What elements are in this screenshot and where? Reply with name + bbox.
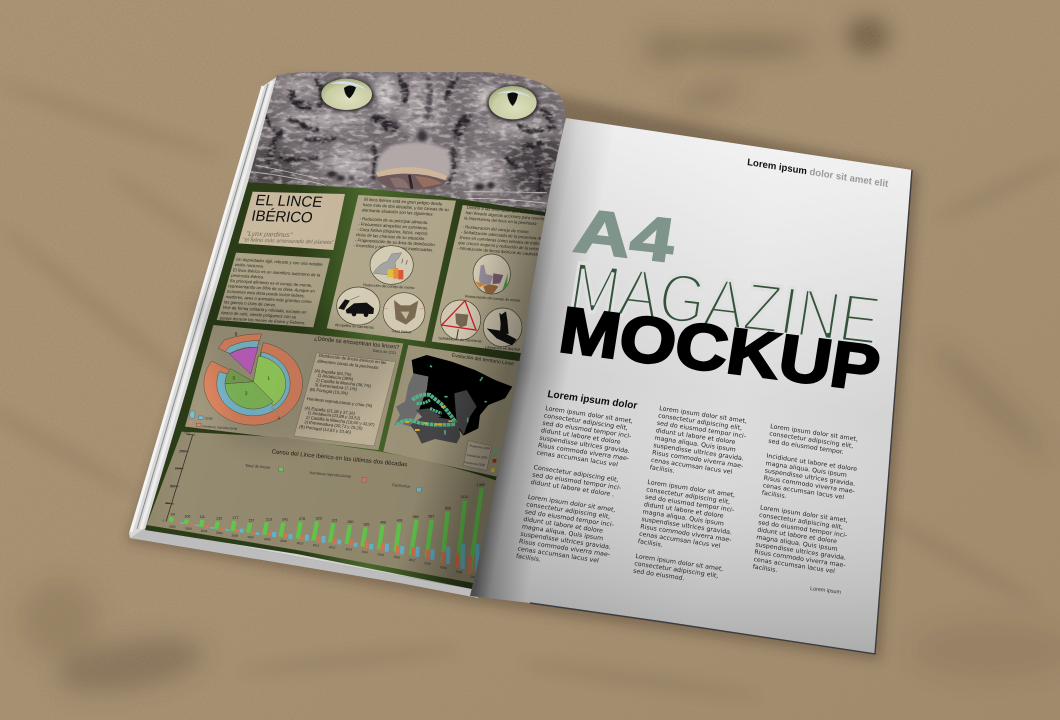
poster: dark green backing	[145, 182, 550, 590]
circle captions	[335, 323, 520, 352]
icon: car roadkill	[337, 287, 380, 325]
panel: census chart	[147, 430, 497, 583]
panel: description text: roedores, aves o animales más grandes como	[225, 294, 313, 304]
panel: conservation: que crucen seguros y reducción de la velocidad	[458, 240, 548, 252]
text column 2: Risus commodo viverra mae-	[640, 523, 732, 544]
panel: census chart: 2000	[183, 430, 190, 434]
chart legend: Cachorros	[392, 482, 411, 489]
text column 3: Incididunt ut labore et dolore	[766, 453, 858, 473]
panel: distribution data box: diferentes zonas de la península:	[317, 358, 379, 370]
text column 2: suspendisse ultrices gravida.	[641, 516, 732, 536]
text column 1	[515, 405, 637, 573]
bar value labels: 321	[332, 518, 338, 522]
headline: MAGAZINE: MAGAZINE	[565, 248, 885, 360]
bar value labels: 100	[184, 514, 190, 518]
right page	[470, 118, 912, 654]
text column 2	[633, 405, 751, 588]
year labels: 2015	[377, 552, 385, 557]
year labels: 2007	[247, 535, 255, 540]
text column 2: didunt ut labore et dolore	[643, 501, 724, 520]
map: Spain	[412, 355, 512, 436]
panel: description text: Su principal alimento es el conejo de monte,	[229, 278, 313, 288]
panel: title tile: EL LINCE	[254, 192, 324, 211]
text column 3: didunt ut labore et dolore	[757, 527, 837, 545]
text column 1: Risus commodo viverra mae-	[537, 442, 630, 463]
poster lower half	[147, 323, 523, 583]
panel: distribution data box: 3) Extremadura (7,1%)	[314, 382, 358, 392]
year labels: 2002	[169, 524, 176, 529]
panel: description text: época de celo, siendo polígamos con su	[221, 310, 297, 320]
pie labels: 1	[267, 375, 270, 380]
text column 1: magna aliqua. Quis ipsum	[521, 523, 604, 542]
map: lynx range patches	[397, 366, 487, 435]
subheading: Lorem ipsum dolor	[546, 389, 638, 412]
poster photo: lynx face close-up	[248, 72, 566, 212]
text column 1: Lorem ipsum dolor sit amet,	[545, 405, 634, 425]
text column 2: facilisis.	[649, 464, 675, 475]
panel: conservation: la importancia del lince en la península:	[464, 215, 538, 226]
panel: description text: los gamos o crías de ciervo.	[223, 299, 277, 307]
pie legend: Crías	[205, 416, 213, 420]
pie chart: lynx distribution	[204, 334, 303, 425]
cheek pad spots	[327, 170, 495, 190]
text column 1: sed do eiusmod tempor inci-	[524, 509, 614, 529]
heading: where are the lynxes: ¿Dónde se encuentran los linces?	[314, 336, 399, 351]
bar value labels: 323	[316, 516, 322, 520]
fur tone masses	[243, 77, 573, 197]
headline: MOCKUP: MOCKUP	[555, 293, 885, 405]
pie labels: 2	[245, 391, 248, 396]
text column 2: magna aliqua. Quis ipsum	[654, 435, 736, 454]
text column 3: Risus commodo viverra mae-	[754, 549, 846, 569]
bar value labels: 94	[171, 512, 175, 516]
panel: census chart: 1500	[179, 449, 186, 453]
panel: pie section	[185, 325, 403, 450]
text column 3: cenas accumsan lacus vel	[762, 482, 845, 501]
text column 2: suspendisse ultrices gravida.	[653, 442, 744, 462]
text column 1: didunt ut labore et dolore	[540, 427, 621, 446]
page header: Lorem ipsum dolor sit amet elit	[747, 157, 889, 190]
year labels: 2016	[393, 555, 401, 560]
panel: threats: - Reducción de su principal alimento.	[359, 216, 429, 225]
text column 3: Lorem ipsum dolor sit amet,	[770, 423, 858, 443]
panel: title tile	[238, 192, 345, 250]
text column 2: Lorem ipsum dolor sit amet,	[659, 405, 748, 425]
panel: distribution data box: (A) España (84,7%)	[314, 368, 353, 377]
text column 2: Lorem ipsum dolor sit amet,	[647, 479, 736, 499]
icon: lynx silhouette	[483, 308, 522, 347]
text column 1: didunt ut labore et dolore .	[530, 479, 615, 498]
panel: distribution data box: 1) Andalucía (38%)	[317, 373, 354, 382]
panel: threats: - Caza furtiva (disparos, lazos, cepos).	[356, 227, 429, 236]
year labels: 2010	[297, 541, 304, 546]
bar value labels: 587	[428, 514, 434, 518]
panel: territory map	[383, 345, 523, 477]
panel: conservation: linces en carreteras como señales de tráfico	[459, 235, 543, 246]
text column 3: suspendisse ultrices gravida.	[764, 467, 856, 488]
year labels: 2006	[231, 533, 239, 538]
circle captions: Caza furtiva	[392, 329, 412, 334]
year labels	[169, 524, 477, 580]
panel: conservation: - Señalización adecuada de la presencia de	[460, 229, 544, 241]
text column 1: suspendisse ultrices gravida.	[539, 435, 631, 455]
pie labels: A	[277, 415, 280, 420]
map: Iberian peninsula	[394, 355, 512, 444]
text column 2: facilisis.	[637, 538, 663, 549]
text column 2: sed do eiusmod.	[633, 568, 685, 582]
icon: right eye	[487, 85, 539, 121]
year labels: 2004	[201, 529, 208, 533]
year labels: 2021	[470, 574, 477, 580]
panel: distribution data box: 2) Castilla la Mancha (19,60 y 43,97)	[305, 415, 376, 427]
year labels: 2003	[185, 526, 192, 531]
panel: description text: representando un 80% de su dieta. Aunque en	[228, 283, 316, 294]
bar value labels: 177	[232, 516, 238, 520]
bar value labels: 133	[216, 517, 222, 521]
panel: census chart: 500	[170, 484, 175, 488]
panel: threats: - Incendios y reforestaciones inadecuadas.	[353, 243, 434, 252]
panel: description text: península ibérica.	[231, 273, 265, 280]
text column 1: Consectetur adipiscing elit,	[533, 464, 619, 484]
panel: distribution data box: (B) Portugal (14,83 y 33,46)	[299, 424, 352, 435]
panel: title tile: "el felino más amenazado del planeta"	[242, 237, 335, 246]
chart legend: Total de linces	[245, 463, 271, 470]
poster top half tiles	[217, 192, 563, 353]
text column 2: sed do eiusmod tempor inci-	[644, 494, 735, 514]
text column 2: didunt ut labore et dolore	[655, 427, 736, 446]
panel: conservation: - Restauración del conejo de monte.	[462, 224, 531, 234]
bar value labels: 241	[282, 518, 288, 522]
panel: distribution data box: 2) Castilla la Mancha (38,7%)	[315, 377, 372, 388]
bar value labels: 1365	[477, 483, 485, 487]
page footer: Lorem ipsum	[810, 586, 842, 596]
text column 3	[752, 423, 862, 584]
bar value labels: 855	[445, 506, 451, 510]
text column 1: cenas accumsan lacus vel	[536, 450, 619, 468]
left page lighting overlay	[145, 182, 550, 590]
magazine: left page stack	[129, 76, 480, 598]
text column 1: facilisis.	[515, 553, 542, 563]
panel: description text: pareja durante los meses de Enero y Febrero.	[219, 315, 306, 325]
panel: conservation: Debido a las amenazas que sufre la especie se	[466, 205, 556, 217]
panel: threats: - Frecuentes atropellos en carreteras.	[358, 221, 429, 231]
map legend: Presencia 1986	[469, 444, 491, 451]
pie labels: 3	[232, 375, 235, 380]
chart heading: Censo del Lince ibérico en las últimas dos décadas	[271, 449, 407, 468]
text column 1: didunt ut labore et dolore	[523, 516, 604, 535]
panel: description text: ocasiones esta dieta puede incluir liebres,	[226, 289, 305, 298]
bars: breeding females	[176, 521, 470, 573]
pie legend: Hembras reproductoras	[202, 424, 238, 431]
text column 3: cenas accumsan lacus vel	[753, 556, 835, 575]
text column 1: sed do eiusmod tempor inci-	[531, 472, 622, 492]
year labels: 2008	[264, 537, 271, 542]
panel: description text	[217, 253, 330, 327]
dark fur stripes	[263, 78, 551, 193]
panel: census chart: 250	[165, 501, 170, 505]
text column 3: consectetur adipiscing elit,	[769, 431, 854, 450]
panel: title tile: "Lynx pardinus"	[245, 231, 293, 239]
bar value labels: 580	[413, 515, 419, 519]
text column 3: Risus commodo viverra mae-	[763, 475, 855, 495]
text column 2: Lorem ipsum dolor sit amet,	[635, 553, 724, 573]
panel: distribution data box: Distribución de linces ibéricos en las	[318, 353, 387, 365]
panel: threats: - Fragmentación de su área de distribución.	[354, 237, 436, 247]
circle captions: Atropellos en carreteras	[335, 323, 374, 330]
map legend: Presencia 2020	[464, 460, 486, 467]
text column 2: Risus commodo viverra mae-	[652, 449, 744, 470]
icon: rabbit recovery	[473, 254, 510, 294]
caption: rabbit recovery: Restauración del conejo de monte	[465, 294, 520, 303]
pie legend	[189, 411, 238, 431]
text column 2: cenas accumsan lacus vel	[650, 457, 733, 476]
magazine drop shadow	[127, 78, 918, 660]
chart legend: Hembras reproductoras	[309, 470, 351, 479]
text column 1: Lorem ipsum dolor sit amet,	[527, 494, 616, 514]
bars: cubs	[182, 522, 477, 575]
text column 1: sed do eiusmod tempor inci-	[542, 420, 632, 440]
panel: territory map: Evolución del territorio Lince	[451, 353, 514, 367]
icon: forehead spot	[417, 130, 427, 142]
year labels: 2012	[329, 545, 336, 550]
bars: total lynxes	[171, 488, 482, 572]
bar value labels	[171, 483, 485, 526]
text column 2: consectetur adipiscing elit,	[634, 560, 719, 580]
text column 1: suspendisse ultrices gravida.	[520, 531, 612, 551]
panel: distribution data box: (B) Portugal (15,3%)	[309, 387, 349, 396]
panel: conservation: han llevado algunas acciones para revertir	[465, 210, 546, 221]
panel: conservation: - Introducción de linces ibéricos de cautividad.	[456, 245, 543, 257]
panel: description text: El lince ibérico es un mamífero autóctono de la	[232, 267, 321, 278]
icon: warning triangle	[441, 300, 481, 340]
pie labels	[232, 331, 280, 420]
text column 3: facilisis.	[752, 564, 778, 574]
text column 1: Risus commodo viverra mae-	[518, 538, 611, 559]
panel: conservation	[432, 205, 563, 353]
year labels: 2005	[216, 531, 223, 535]
map legend: Presencia 1990	[467, 453, 488, 460]
icon: lynx face target	[383, 293, 425, 333]
bar value labels: 157	[248, 518, 254, 522]
panel: census chart: 0	[163, 518, 165, 522]
bar value labels: 406	[380, 520, 386, 524]
bar value labels: 1111	[461, 495, 468, 499]
year labels: 2020	[455, 569, 463, 575]
bar value labels: 278	[299, 517, 305, 521]
panel: threats: alarmante situación son las siguientes:	[361, 207, 434, 217]
text column 3: facilisis.	[761, 490, 787, 500]
map: southern and eastern regions	[410, 390, 477, 444]
text column 3: Lorem ipsum dolor sit amet,	[760, 504, 848, 524]
text column 3: consectetur adipiscing elit,	[759, 512, 844, 531]
panel: title tile: IBÉRICO	[250, 208, 314, 226]
text column 1: cenas accumsan lacus vel	[517, 546, 600, 565]
bar value labels: 491	[397, 518, 403, 522]
panel: threats: El lince ibérico está en gran peligro desde	[364, 197, 443, 206]
circle captions: Señalización de carreteras	[438, 336, 482, 343]
panel: threats: hace más de dos décadas, y las causas de su	[362, 202, 450, 212]
caption: rabbit decline: Reducción del conejo de monte	[363, 283, 415, 290]
text column 2: consectetur adipiscing elit,	[658, 413, 743, 432]
icon: rabbit decline	[370, 246, 413, 284]
year labels: 2011	[313, 543, 320, 548]
year labels: 2017	[409, 558, 416, 563]
panel: description text: Vive de forma solitaria y nómada, excepto en	[222, 305, 308, 315]
year labels: 2019	[440, 565, 447, 570]
icon: left eye	[319, 78, 374, 112]
bar value labels: 213	[266, 517, 272, 521]
chart axis	[166, 434, 195, 522]
panel: distribution data box: 1) Andalucía (23,89 y 33,52)	[307, 410, 361, 421]
headline: A4: A4	[570, 196, 679, 275]
text column 3: sed do eiusmod tempor inci-	[758, 519, 848, 539]
circle captions: Liberación en libertad	[485, 345, 520, 352]
panel: distribution data box	[294, 353, 396, 446]
text column 2: magna aliqua. Quis ipsum	[642, 509, 724, 528]
text column 2: sed do eiusmod tempor inci-	[656, 420, 746, 440]
text column 3: magna aliqua. Quis ipsum	[756, 534, 838, 553]
panel: description text: Un depredador ágil, robusto y con una notable	[236, 257, 324, 267]
text column 2: cenas accumsan lacus vel	[639, 531, 721, 550]
text column 1: consectetur adipiscing elit,	[543, 413, 628, 432]
map: Portugal	[394, 373, 428, 427]
text column 3: magna aliqua. Quis ipsum	[765, 460, 847, 479]
year labels: 2009	[280, 539, 287, 543]
year labels: 2014	[361, 550, 369, 555]
map legend	[463, 441, 498, 472]
panel: threats: chías de las crianzas de su situación.	[355, 232, 426, 241]
panel: distribution data box: 3) Extremadura (20,73 y 29,26)	[304, 419, 364, 431]
year labels: 2013	[345, 547, 353, 552]
text column 2: consectetur adipiscing elit,	[646, 486, 731, 506]
text column 1: consectetur adipiscing elit,	[526, 501, 611, 521]
bar value labels: 280	[347, 520, 353, 524]
year labels: 2018	[424, 561, 431, 566]
panel: distribution data box: (A) España (21,28 y 37,16)	[304, 405, 356, 416]
panel: pie section: Datos de 2021	[373, 349, 397, 355]
text column 3: sed do eiusmod tempor.	[768, 438, 844, 456]
panel: census chart: 1000	[175, 466, 182, 470]
text column 3: suspendisse ultrices gravida.	[755, 541, 846, 562]
bar value labels: 326	[363, 522, 369, 526]
bar value labels: 111	[199, 515, 205, 519]
panel: description text: visión nocturna.	[234, 262, 265, 269]
panel: distribution data box: Hembras reproductoras y crías (%)	[306, 396, 373, 408]
nose and muzzle	[376, 142, 451, 189]
pie labels: B	[235, 331, 238, 336]
panel: threats	[327, 195, 456, 342]
chart legend	[245, 463, 422, 492]
whiskers	[250, 165, 547, 203]
